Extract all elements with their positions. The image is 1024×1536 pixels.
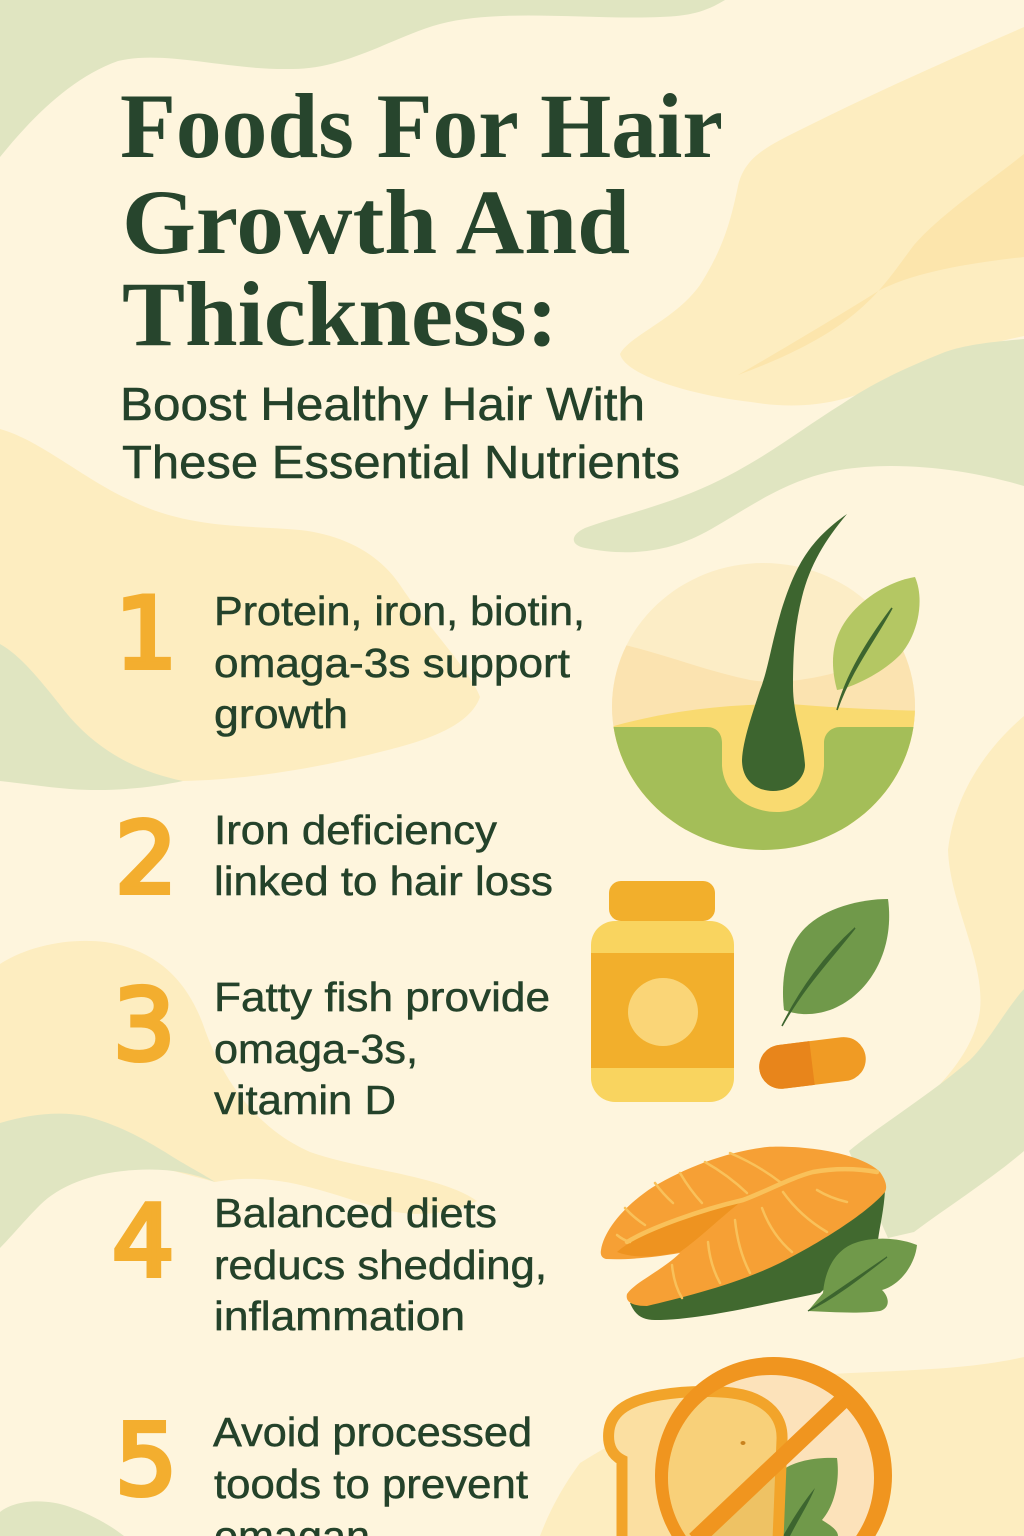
title: Growth And [122,171,630,273]
text: item 2 [214,807,553,904]
text: item 4: reducs shedding, [214,1242,547,1288]
text: item 3: omaga-3s, [214,1026,418,1072]
icon: salmon steak [601,1147,917,1320]
text: item 2: linked to hair loss [214,858,553,904]
icon: supplement bottle [591,881,734,1102]
icon: hair follicle [600,514,930,860]
text: item 4: Balanced diets [214,1190,497,1236]
title: Thickness: [122,263,558,365]
subtitle: Boost Healthy Hair With [120,378,645,430]
subtitle: These Essential Nutrients [122,436,680,488]
number 5: 5 [115,1404,177,1518]
icon: green leaf [782,899,889,1026]
text: item 3 [214,974,550,1123]
icon: crossed-out bread [609,1357,892,1536]
text: item 5: Avoid processed [213,1409,532,1455]
text: item 5: toods to prevent [214,1461,529,1507]
text: item 1: growth [214,691,348,737]
number 3: 3 [113,969,175,1083]
text: item 3: vitamin D [214,1077,396,1123]
text: item 1 [214,588,585,737]
title: Foods For Hair [120,75,723,177]
text: item 2: Iron deficiency [214,807,498,853]
number 1: 1 [115,578,177,692]
text: item 4 [214,1190,547,1339]
text: item 1: omaga-3s support [214,640,571,686]
text: item 1: Protein, iron, biotin, [214,588,585,634]
title [120,75,723,365]
text: item 5 [213,1409,532,1536]
number 2: 2 [115,802,177,916]
text: item 4: inflammation [214,1293,465,1339]
number 4: 4 [112,1186,174,1300]
subtitle [120,378,680,488]
text: item 3: Fatty fish provide [214,974,550,1020]
icon: capsule [757,1035,868,1091]
